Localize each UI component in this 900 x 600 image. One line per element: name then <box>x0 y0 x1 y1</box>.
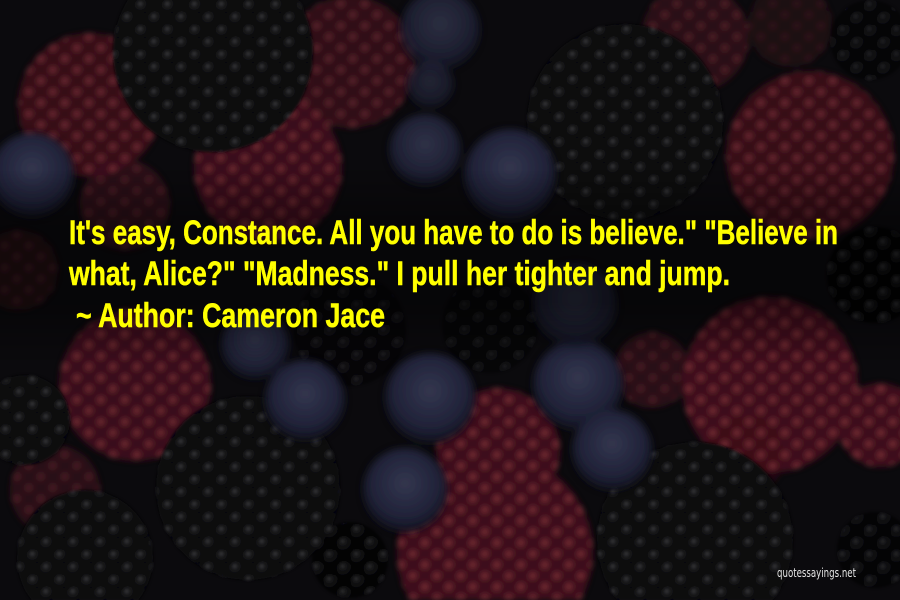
watermark: quotessayings.net <box>777 565 856 580</box>
dark band behind quote <box>0 170 900 360</box>
quote line 2: what, Alice?" "Madness." I pull her tighter and jump. <box>68 255 730 293</box>
blueberries <box>0 0 652 532</box>
quote text <box>68 214 838 335</box>
author line: ~ Author: Cameron Jace <box>76 297 385 335</box>
